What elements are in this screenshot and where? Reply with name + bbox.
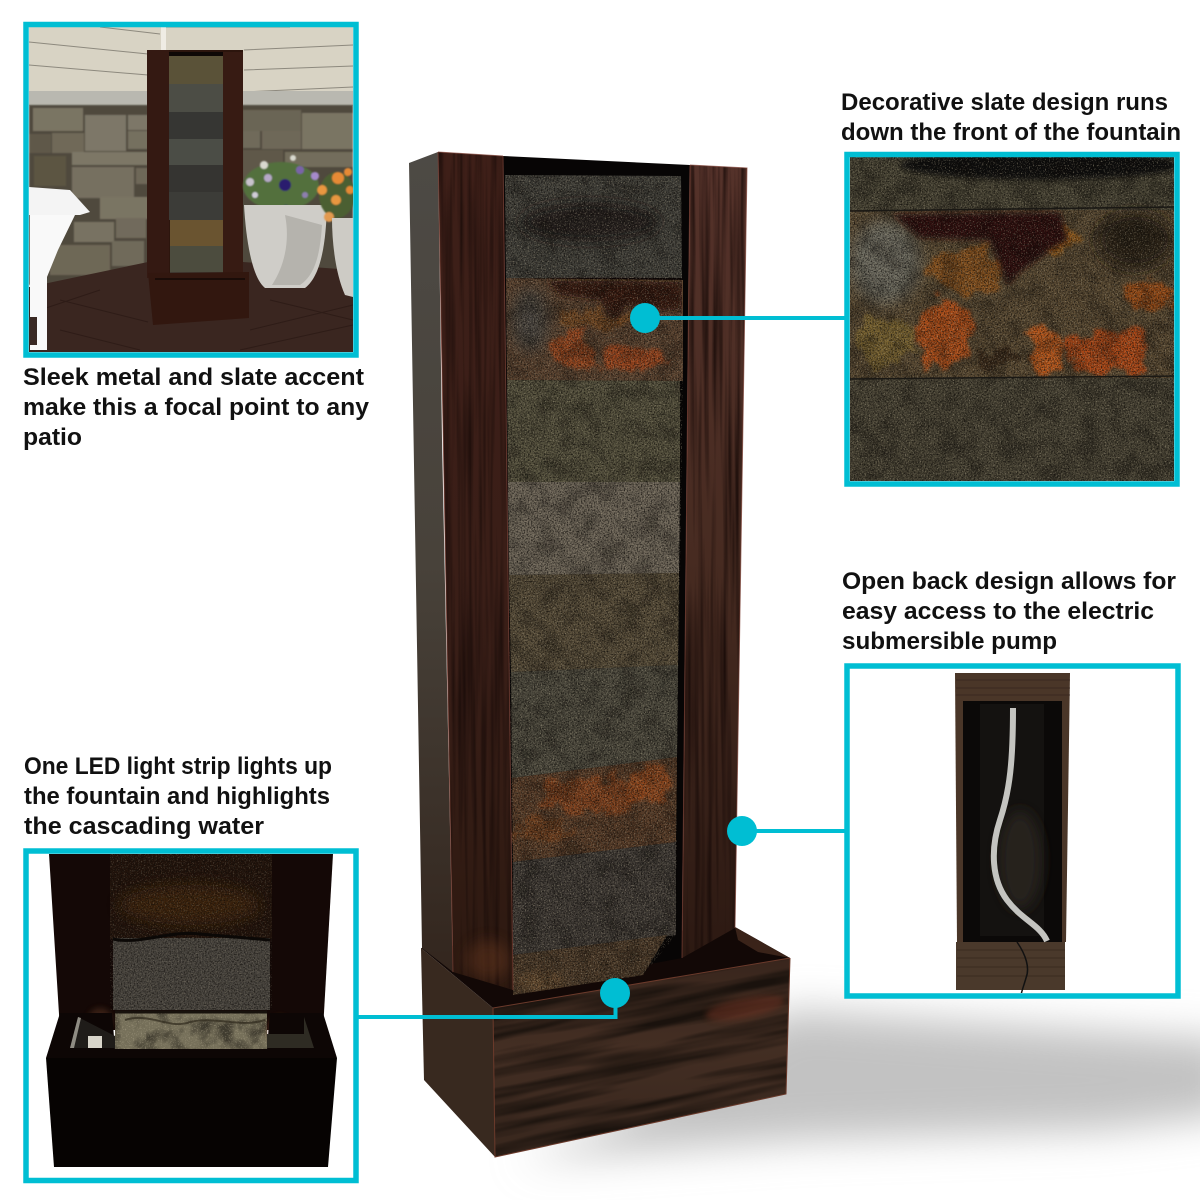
caption: open back: Open back design allows for bbox=[842, 568, 1176, 595]
left pillar front face bbox=[438, 152, 512, 990]
base back right rim bbox=[735, 927, 790, 958]
callout: open back bbox=[727, 816, 847, 846]
orange rust patches bbox=[855, 226, 1176, 372]
back base bbox=[956, 942, 1065, 990]
slate colour patches bbox=[500, 170, 690, 1000]
lit lower slate bbox=[115, 1012, 267, 1049]
grey patch bbox=[849, 220, 921, 304]
planter with purple flowers bbox=[243, 155, 327, 288]
panel: outdoor patio scene bbox=[26, 24, 356, 355]
caption: decorative slate: down the front of the fountain bbox=[841, 119, 1181, 146]
border bbox=[26, 24, 356, 355]
caption: decorative slate: Decorative slate design runs bbox=[841, 89, 1168, 116]
caption: decorative slate bbox=[841, 89, 1181, 146]
middle slate bbox=[113, 938, 270, 1010]
right interior bbox=[267, 1017, 314, 1048]
slate stones bbox=[500, 170, 690, 1000]
dark right patch bbox=[1097, 212, 1173, 268]
caption: sleek metal bbox=[23, 364, 370, 451]
white water tube bbox=[994, 708, 1047, 941]
floor bbox=[29, 262, 353, 352]
caption: open back: submersible pump bbox=[842, 628, 1057, 655]
copper glow bbox=[266, 1019, 270, 1034]
small fountain bbox=[147, 50, 249, 325]
frame and base streaks bbox=[956, 680, 1070, 976]
right pillar front face bbox=[680, 160, 750, 960]
stone joint lines bbox=[850, 207, 1174, 379]
stone trim bbox=[29, 91, 353, 106]
upper slate bbox=[110, 854, 272, 939]
white chair bbox=[29, 187, 90, 350]
caption: open back bbox=[842, 568, 1176, 655]
basin top bbox=[46, 1013, 337, 1058]
floor shadow bbox=[520, 1010, 1200, 1160]
left interior with LED strip bbox=[70, 1017, 115, 1048]
panel: open back view bbox=[847, 666, 1178, 996]
callout: LED strip bbox=[356, 978, 630, 1017]
dark pillars bbox=[49, 854, 333, 1030]
base side face bbox=[421, 948, 495, 1157]
pillar copper edges bbox=[438, 152, 747, 990]
base back and inner basin bbox=[421, 927, 790, 1008]
caption: LED light bbox=[24, 753, 332, 840]
slate backing recess bbox=[503, 156, 690, 990]
panel: LED lit view bbox=[26, 851, 356, 1180]
caption: LED light: One LED light strip lights up bbox=[24, 753, 332, 780]
dark opening bbox=[963, 701, 1062, 942]
border bbox=[847, 666, 1178, 996]
caption: sleek metal: patio bbox=[23, 424, 82, 451]
caption: sleek metal: make this a focal point to any bbox=[23, 394, 370, 421]
maroon patch bbox=[892, 212, 1068, 285]
dark top band bbox=[898, 157, 1174, 184]
base front face bbox=[493, 958, 790, 1156]
power cord bbox=[1017, 942, 1028, 995]
border bbox=[26, 851, 356, 1180]
siding wall bbox=[29, 27, 353, 97]
left pillar side face bbox=[409, 152, 453, 972]
base rim edges bbox=[493, 958, 790, 1157]
main fountain bbox=[409, 152, 790, 1158]
callout: slate design bbox=[630, 303, 847, 333]
base front bbox=[46, 1058, 337, 1167]
caption: LED light: the cascading water bbox=[24, 813, 264, 840]
planter with orange flowers bbox=[317, 168, 355, 297]
border bbox=[847, 154, 1177, 484]
caption: sleek metal: Sleek metal and slate accent bbox=[23, 364, 364, 391]
back frame bbox=[955, 673, 1070, 942]
floor brick lines bbox=[40, 290, 353, 350]
caption: LED light: the fountain and highlights bbox=[24, 783, 330, 810]
stone wall bbox=[29, 105, 353, 285]
panel: slate close-up bbox=[847, 150, 1180, 484]
caption: open back: easy access to the electric bbox=[842, 598, 1154, 625]
